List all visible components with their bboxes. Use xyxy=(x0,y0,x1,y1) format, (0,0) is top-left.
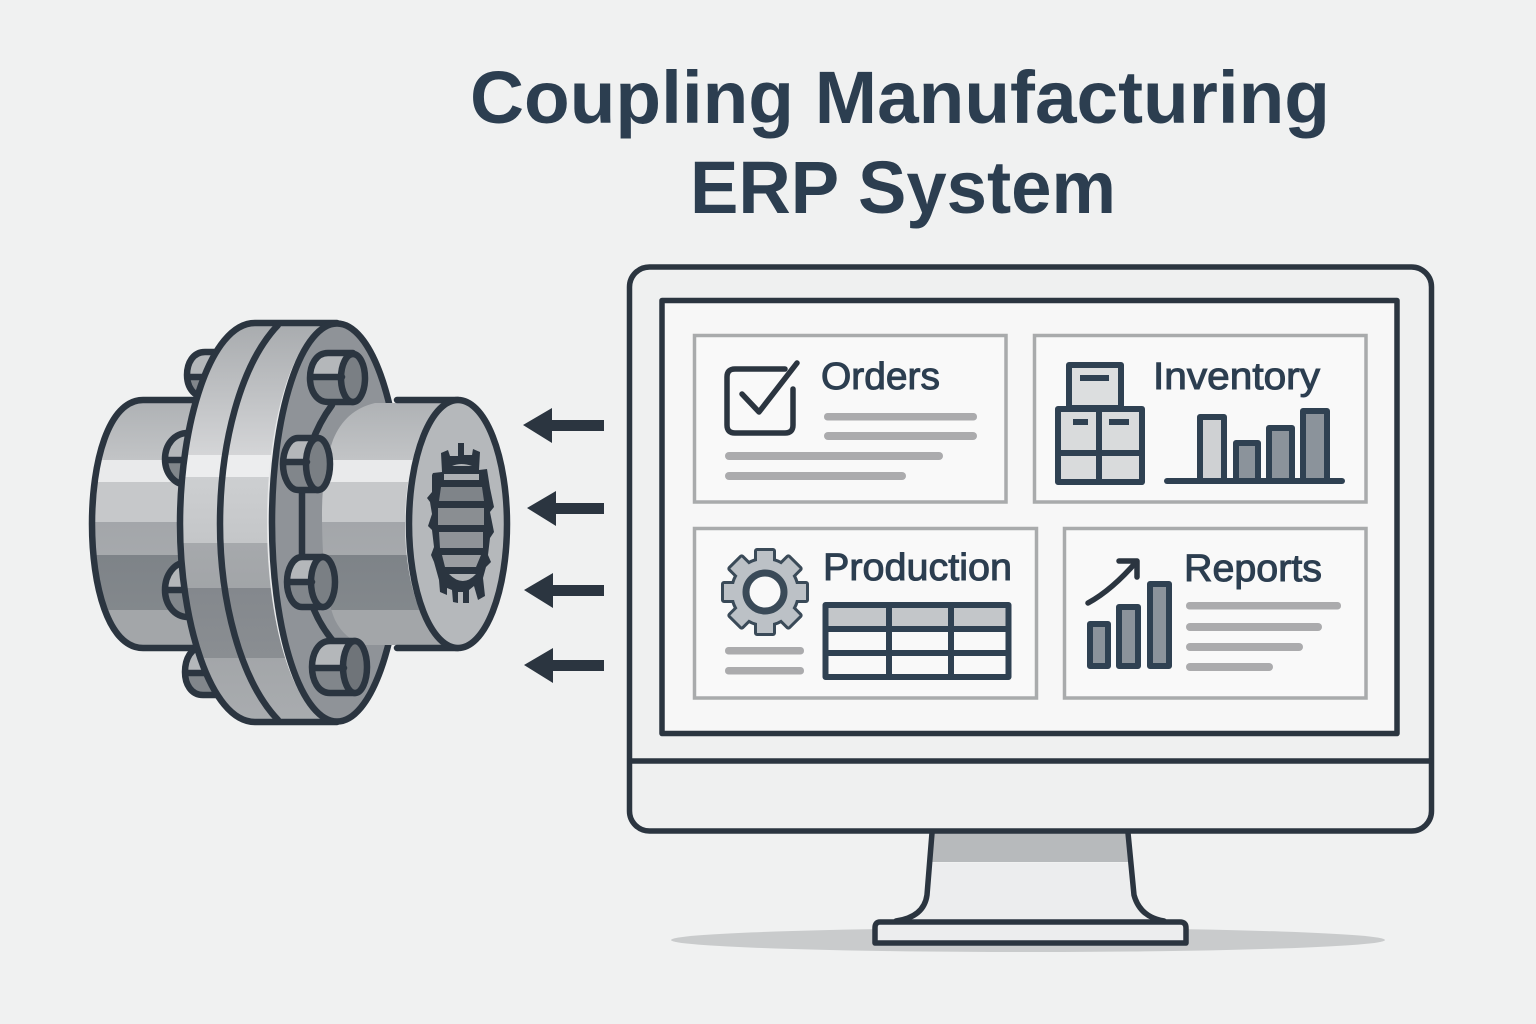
icon: trend arrow xyxy=(1088,561,1137,603)
icon: checkbox xyxy=(727,369,793,433)
icon: rising bars xyxy=(1090,584,1169,666)
desk shadow xyxy=(671,928,1385,952)
heading: production: Production xyxy=(823,547,1012,589)
arrow 1 xyxy=(523,408,604,443)
title: Coupling Manufacturing xyxy=(470,56,1330,139)
right hub outline xyxy=(397,400,458,648)
heading: reports: Reports xyxy=(1184,548,1322,590)
arrow 2 xyxy=(527,491,604,526)
heading: orders: Orders xyxy=(821,356,940,398)
text placeholder lines xyxy=(1186,602,1341,671)
panel: production xyxy=(694,528,1036,698)
table xyxy=(825,605,1009,677)
arrows from monitor to coupling xyxy=(523,408,604,683)
monitor bezel xyxy=(630,267,1432,831)
hub end highlight xyxy=(405,402,505,646)
monitor xyxy=(630,267,1432,831)
icon: stacked boxes xyxy=(1058,365,1142,482)
right hub body xyxy=(322,403,460,645)
hub end face xyxy=(409,400,507,648)
panel: orders xyxy=(694,336,1006,502)
rear bolts xyxy=(165,352,222,695)
flange rim xyxy=(180,323,337,722)
coupling illustration xyxy=(92,323,507,722)
chin divider xyxy=(631,758,1430,764)
monitor stand xyxy=(875,833,1186,943)
panel: reports xyxy=(1064,528,1366,698)
arrow 3 xyxy=(524,573,604,608)
text placeholder lines xyxy=(725,413,977,480)
bar chart: inventory xyxy=(1167,411,1342,481)
flange face xyxy=(272,324,402,722)
title: ERP System xyxy=(690,146,1116,229)
left hub xyxy=(92,400,230,648)
heading: inventory: Inventory xyxy=(1153,356,1320,398)
screen xyxy=(662,300,1397,734)
bolt ring xyxy=(302,405,334,642)
panel: inventory xyxy=(1034,336,1366,502)
spline bore xyxy=(427,443,494,603)
front bolts xyxy=(283,353,367,693)
arrow 4 xyxy=(524,648,604,683)
title xyxy=(470,56,1330,229)
icon: check mark xyxy=(742,363,797,412)
icon: gear xyxy=(724,551,806,633)
flange groove xyxy=(220,325,278,720)
text placeholder lines xyxy=(725,647,804,674)
flange face highlight xyxy=(267,326,399,720)
